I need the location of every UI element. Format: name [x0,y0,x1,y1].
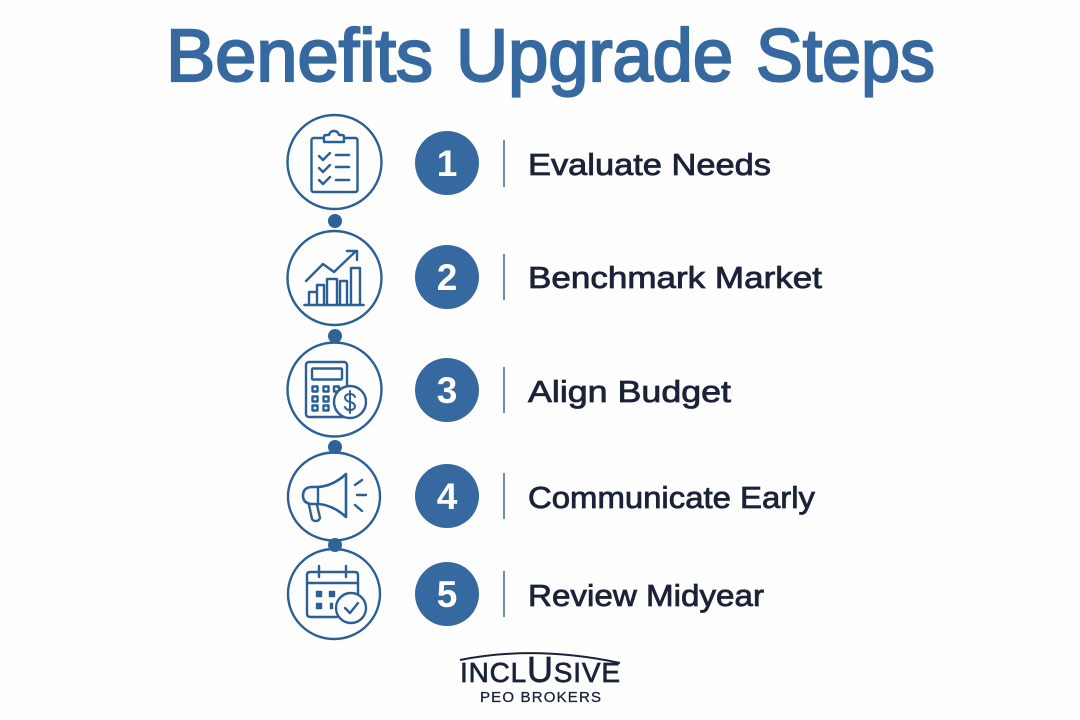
icon: calendar with check [288,549,380,639]
number badge 5: 5 [437,574,457,615]
divider [503,571,505,617]
icon: clipboard checklist [288,115,382,209]
icon: megaphone [288,452,380,540]
number badge 1: 1 [437,143,457,184]
label: Benchmark Market: Benchmark Market [528,260,822,295]
step 1 [288,115,771,209]
title: Steps [756,14,935,97]
label: Communicate Early: Communicate Early [528,480,816,515]
number badge 4: 4 [437,476,458,517]
divider [503,473,505,519]
icon: calculator with dollar [288,342,382,436]
number badge 2: 2 [437,257,457,298]
number badge 2 [415,245,479,309]
connector dots [328,214,342,552]
logo: Inclusive PEO Brokers: INCLUSIVE [460,649,620,690]
step 3 [288,342,731,436]
logo: Inclusive PEO Brokers: PEO BROKERS [480,689,601,706]
number badge 3: 3 [437,370,457,411]
divider [503,140,505,187]
title: Benefits [166,14,433,97]
divider [503,367,505,413]
title [166,14,935,97]
number badge 5 [415,562,479,626]
number badge 1 [415,131,479,195]
label: Evaluate Needs: Evaluate Needs [528,147,771,182]
number badge 4 [415,464,479,528]
label: Align Budget: Align Budget [528,374,731,409]
divider [503,254,505,300]
number badge 3 [415,358,479,422]
step 5 [288,549,764,639]
step 2 [288,231,822,325]
title: Upgrade [456,14,733,97]
icon: growth chart [288,231,382,325]
step 4 [288,452,816,540]
label: Review Midyear: Review Midyear [528,578,764,613]
